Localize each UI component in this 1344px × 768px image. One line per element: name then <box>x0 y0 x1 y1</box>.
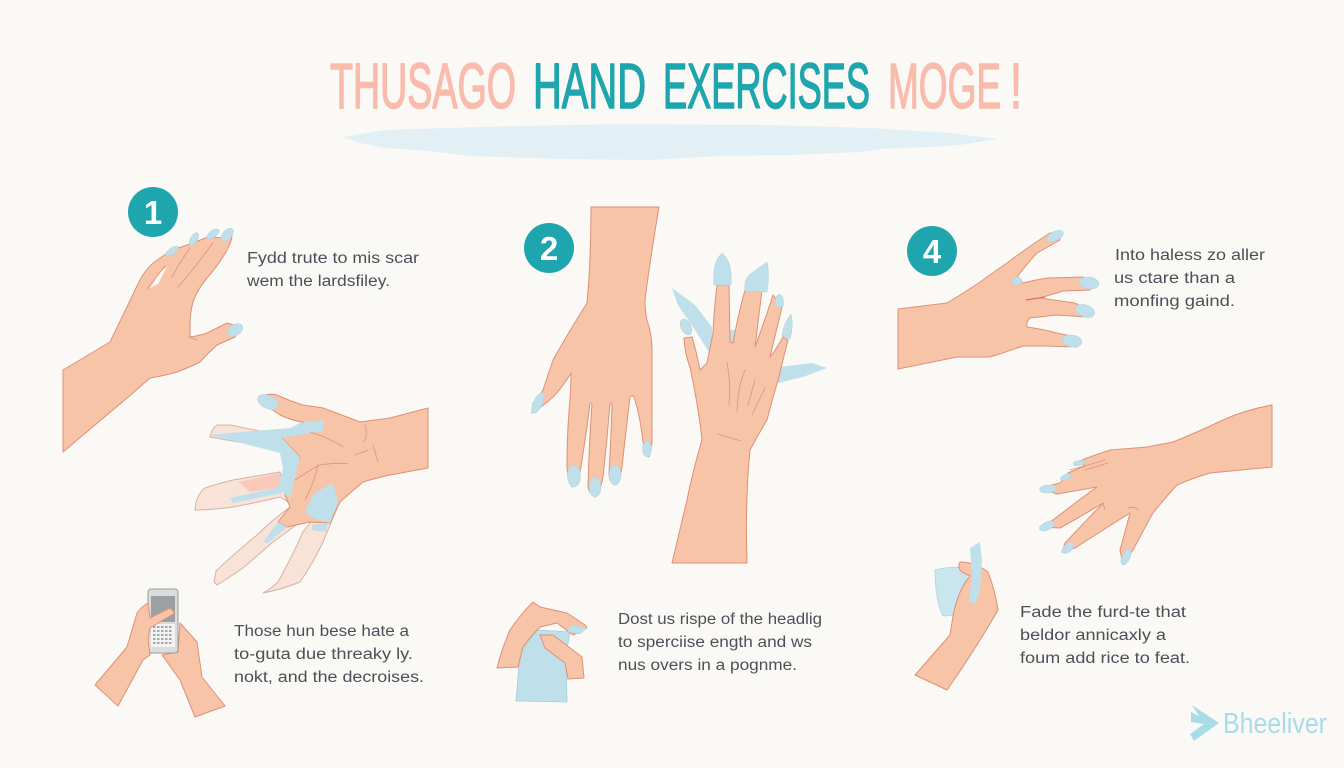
step 1 body text: Fydd trute to mis scar <box>247 250 419 267</box>
title <box>330 50 1022 122</box>
phone step body text: Those hun bese hate a <box>234 623 409 640</box>
phone step body text <box>234 623 424 686</box>
step 4 spread hand <box>898 228 1100 369</box>
step 2 badge: 2 <box>540 230 558 267</box>
step 1 body text: wem the lardsfiley. <box>246 273 390 290</box>
phone step body text: to-guta due threaky ly. <box>234 646 413 663</box>
bottle step body text: beldor annicaxly a <box>1020 627 1166 644</box>
step 4 badge <box>907 226 957 276</box>
step 2 left hand <box>529 207 659 497</box>
painted palm hand <box>195 391 428 593</box>
bottle hand icon <box>915 542 998 690</box>
bottle step body text <box>1020 604 1190 667</box>
towel hands icon <box>497 602 587 702</box>
title: HAND <box>533 50 646 122</box>
towel step body text: to sperciise ength and ws <box>618 634 812 651</box>
logo: Bheeliver <box>1223 708 1327 740</box>
step 4 lower reaching hand <box>1038 405 1272 566</box>
title: EXERCISES <box>663 50 870 122</box>
logo <box>1190 705 1327 741</box>
title: ! <box>1010 50 1022 122</box>
step 4 body text <box>1114 247 1265 310</box>
bottle step body text: foum add rice to feat. <box>1020 650 1190 667</box>
step 4 body text: monfing gaind. <box>1114 293 1235 310</box>
step 2 badge <box>524 223 574 273</box>
step 2 right hand <box>672 253 827 563</box>
step 1 badge: 1 <box>144 194 162 231</box>
towel step body text: Dost us rispe of the headlig <box>618 611 822 628</box>
bottle step body text: Fade the furd-te that <box>1020 604 1187 621</box>
step 1 body text <box>246 250 419 290</box>
towel step body text <box>618 611 822 674</box>
step 1 badge <box>128 187 178 237</box>
title: THUSAGO <box>330 50 516 122</box>
towel step body text: nus overs in a pognme. <box>618 657 797 674</box>
step 1 raised hand <box>63 226 245 452</box>
title: MOGE <box>888 50 1001 122</box>
step 4 body text: Into haless zo aller <box>1115 247 1265 264</box>
phone step body text: nokt, and the decroises. <box>234 669 424 686</box>
title brush stroke <box>342 124 998 160</box>
step 4 body text: us ctare than a <box>1114 270 1235 287</box>
phone hands icon <box>95 589 225 717</box>
step 4 badge: 4 <box>923 233 942 270</box>
